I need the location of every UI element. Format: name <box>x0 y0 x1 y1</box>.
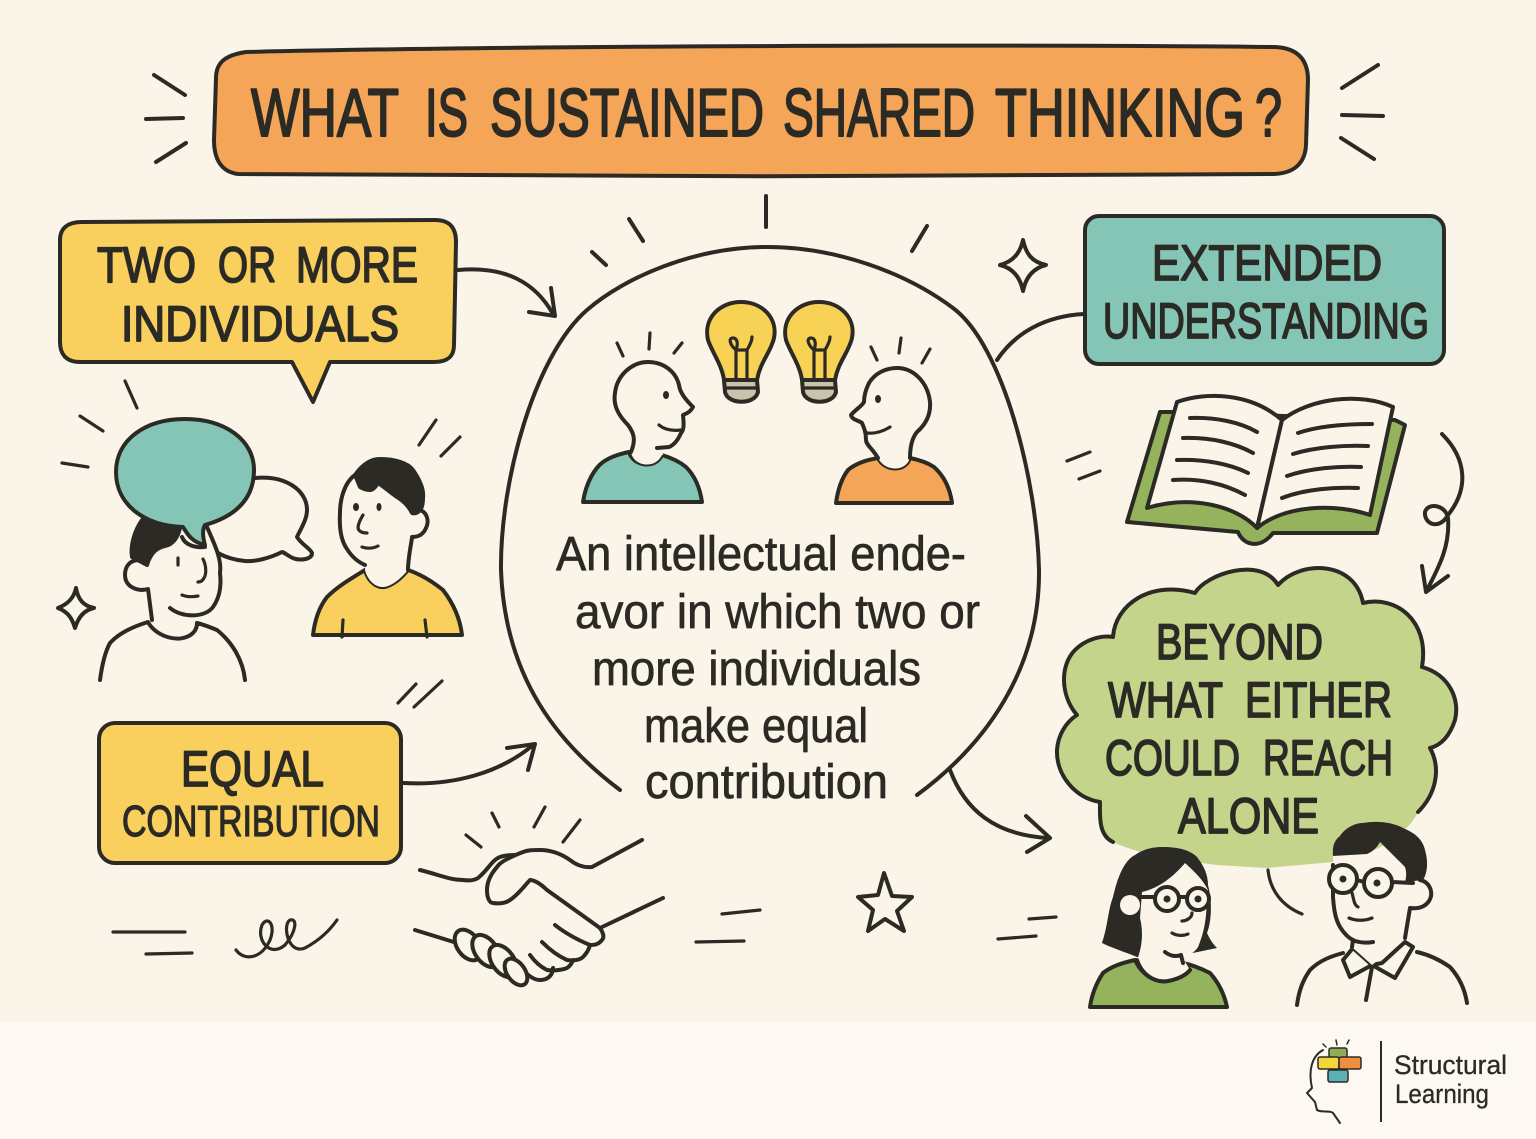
title banner: WHAT <box>251 75 399 151</box>
title banner: THINKING <box>995 75 1245 151</box>
doodle: dashes and squiggle <box>113 910 1056 957</box>
thought cloud: beyond what either could reach alone: EITHER <box>1245 672 1392 728</box>
callout: extended understanding <box>1085 216 1444 364</box>
title banner: SHARED <box>783 75 975 151</box>
arrow: contribution to centre <box>403 744 535 783</box>
definition text: make equal <box>644 700 868 753</box>
illustration: man with glasses <box>1297 822 1467 1005</box>
callout: two or more individuals: MORE <box>296 237 418 293</box>
logo: structural learning <box>1307 1040 1507 1123</box>
title banner: SUSTAINED <box>490 75 764 151</box>
definition text: more individuals <box>592 643 921 696</box>
footer band <box>0 1022 1536 1139</box>
icon: sparkle left <box>58 588 94 628</box>
title banner <box>214 46 1308 176</box>
thought cloud: beyond what either could reach alone: ALONE <box>1178 788 1319 844</box>
lightbulb right <box>785 302 853 402</box>
title accent lines left <box>146 75 186 162</box>
connector: centre to understanding <box>997 314 1084 360</box>
logo wordmark: Structural <box>1394 1050 1507 1080</box>
illustration: woman with glasses <box>1090 847 1227 1007</box>
thought cloud: beyond what either could reach alone: REACH <box>1263 730 1393 786</box>
thought cloud: beyond what either could reach alone: BEYOND <box>1156 614 1323 670</box>
thought cloud: beyond what either could reach alone: COULD <box>1105 730 1240 786</box>
handshake accent lines <box>398 681 580 847</box>
thought cloud: beyond what either could reach alone: WHAT <box>1108 672 1223 728</box>
icon: star <box>858 873 912 931</box>
callout: equal contribution: EQUAL <box>181 741 324 797</box>
book accent lines <box>1067 452 1100 479</box>
illustration: handshake <box>415 840 663 989</box>
definition text: An intellectual ende- <box>556 528 966 581</box>
thought cloud: beyond what either could reach alone <box>1057 568 1456 868</box>
logo divider <box>1380 1041 1382 1122</box>
callout: two or more individuals <box>60 220 456 402</box>
callout: two or more individuals: INDIVIDUALS <box>121 296 399 352</box>
arrow: book to cloud, looped <box>1422 434 1462 592</box>
person right <box>313 459 462 637</box>
teal speech bubble <box>116 419 254 545</box>
person right with orange top <box>836 368 952 503</box>
arrow: individuals to centre <box>458 269 555 316</box>
illustration: two people talking <box>100 419 462 680</box>
white speech bubble <box>218 478 312 561</box>
accent lines around people <box>62 381 460 467</box>
icon: sparkle right <box>1000 240 1046 291</box>
callout: two or more individuals: OR <box>218 237 276 293</box>
title accent lines right <box>1341 65 1383 159</box>
logo icon <box>1307 1040 1361 1123</box>
definition text: contribution <box>645 756 888 809</box>
rays above circle <box>592 196 927 265</box>
idea rays <box>617 333 930 363</box>
definition text <box>556 528 980 809</box>
callout: two or more individuals: TWO <box>97 237 196 293</box>
title banner: ? <box>1255 75 1282 151</box>
arrow: centre to cloud <box>950 770 1050 852</box>
callout: equal contribution <box>99 723 401 863</box>
callout: equal contribution: CONTRIBUTION <box>122 797 380 846</box>
person left with teal top <box>583 362 702 502</box>
lightbulb left <box>707 302 775 402</box>
definition text: avor in which two or <box>575 586 980 639</box>
person left <box>100 520 245 680</box>
callout: extended understanding: EXTENDED <box>1152 235 1382 291</box>
centre panel: definition circle <box>501 247 1039 809</box>
title banner: IS <box>425 75 468 151</box>
callout: extended understanding: UNDERSTANDING <box>1103 293 1429 349</box>
logo: structural learning: Learning <box>1395 1079 1489 1109</box>
speech tail between couple <box>1268 870 1302 914</box>
icon: open book <box>1127 396 1405 544</box>
